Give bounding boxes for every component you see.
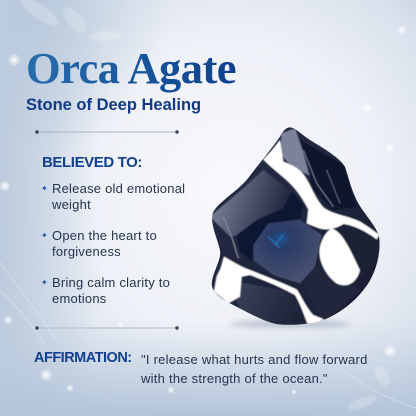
item 2 — [41, 228, 157, 259]
affirmation quote — [141, 352, 368, 386]
divider bottom — [35, 326, 179, 330]
stone: orca agate — [212, 127, 380, 330]
item 3: emotions — [52, 291, 107, 306]
item 3: ✦ — [41, 278, 48, 287]
item 2: Open the heart to — [52, 228, 157, 243]
title: Orca Agate — [26, 43, 236, 93]
item 1: Release old emotional — [52, 181, 185, 196]
veins — [214, 140, 379, 324]
affirmation quote: "I release what hurts and flow forward — [141, 352, 368, 367]
affirmation label: AFFIRMATION: — [34, 350, 132, 366]
item 1: ✦ — [41, 184, 48, 193]
item 2: forgiveness — [52, 244, 121, 259]
list — [41, 181, 185, 306]
divider top — [35, 130, 179, 134]
item 1 — [41, 181, 185, 212]
item 3: Bring calm clarity to — [52, 275, 170, 290]
item 2: ✦ — [41, 231, 48, 240]
heading: believed to: BELIEVED TO: — [42, 154, 142, 171]
item 3 — [41, 275, 170, 306]
affirmation quote: with the strength of the ocean." — [141, 370, 328, 386]
subtitle: Stone of Deep Healing — [26, 96, 201, 114]
item 1: weight — [52, 197, 91, 212]
